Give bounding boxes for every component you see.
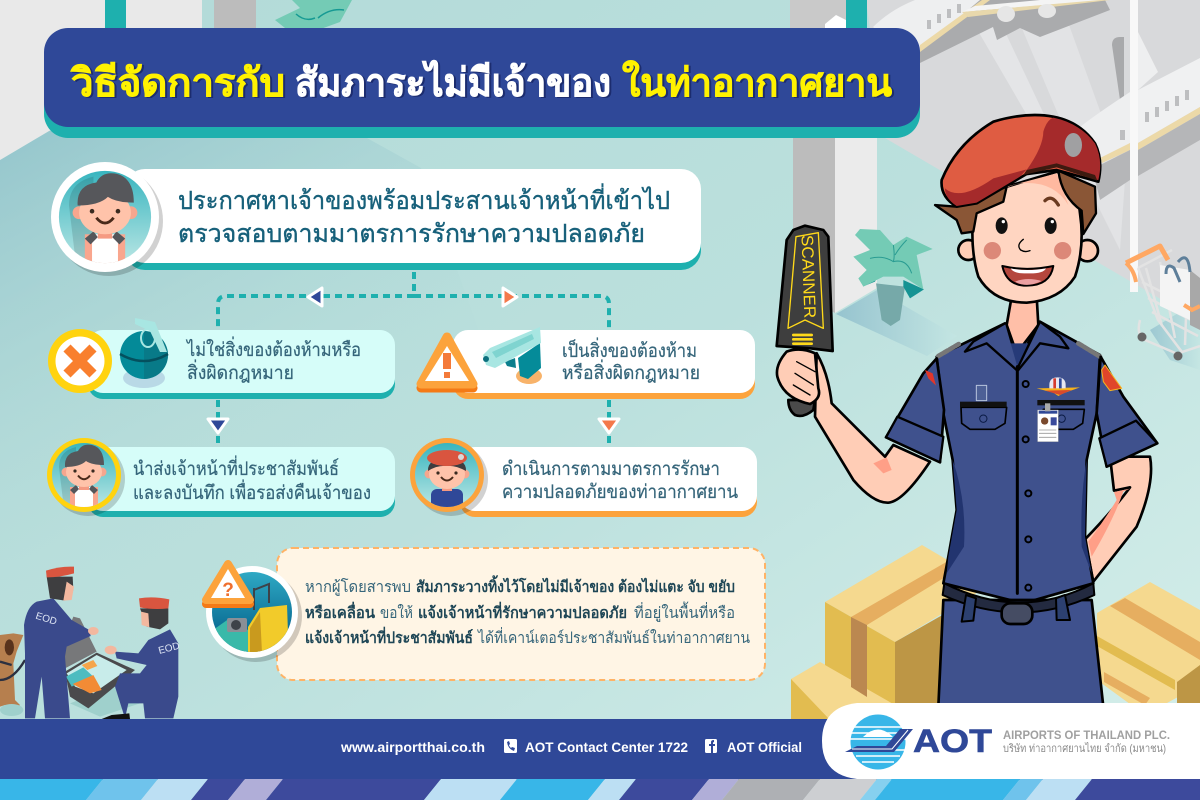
logo panel: AOT (913, 723, 993, 759)
open suitcase (62, 617, 140, 717)
box: hand over to public relations: และลงบันทึก เพื่อรอส่งคืนเจ้าของ (133, 479, 371, 504)
icon: handgun (483, 327, 542, 384)
notice callout (277, 548, 765, 680)
officer belt (943, 583, 1094, 624)
box: security measures: ความปลอดภัยของท่าอากาศยาน (502, 482, 738, 503)
step 1: announce for owner (51, 162, 701, 276)
icon: unattended luggage with question mark: ? (222, 580, 234, 601)
AOT logo mark (845, 714, 913, 770)
metal detector scanner: SCANNER (797, 235, 819, 319)
officer ID card (1038, 403, 1058, 442)
logo panel (822, 703, 1200, 779)
box: prohibited: หรือสิ่งผิดกฎหมาย (562, 359, 700, 384)
officer trousers (938, 600, 1103, 707)
logo panel: AIRPORTS OF THAILAND PLC. (1003, 728, 1170, 742)
sniffer dog (0, 633, 25, 716)
footer contact line: AOT Contact Center 1722 (525, 739, 688, 755)
box: hand over to public relations (47, 438, 395, 517)
potted plant (853, 229, 933, 326)
officer neck (1007, 297, 1038, 353)
EOD officer kneeling (102, 597, 181, 719)
officer right sleeve (886, 358, 944, 462)
avatar: security officer (410, 438, 488, 516)
notice callout: ได้ที่เคาน์เตอร์ประชาสัมพันธ์ในท่าอากาศยาน (476, 627, 750, 647)
footer contact line (340, 739, 802, 755)
shopping trolley with bag (1126, 246, 1200, 370)
EOD officer standing: EOD (34, 611, 58, 628)
step 1: announce for owner: ตรวจสอบตามมาตรการรักษาความปลอดภัย (178, 220, 645, 248)
box: security measures (410, 438, 757, 517)
title banner: ในท่าอากาศยาน (622, 60, 892, 105)
footer contact line: www.airportthai.co.th (340, 739, 485, 755)
plant at top behind banner (275, 0, 352, 32)
logo panel: บริษัท ท่าอากาศยานไทย จำกัด (มหาชน) (1003, 742, 1166, 755)
officer head (935, 171, 1098, 303)
footer bar (0, 703, 1200, 800)
title banner (44, 28, 920, 138)
officer arm on hip (1085, 457, 1151, 582)
notice callout: แจ้งเจ้าหน้าที่ประชาสัมพันธ์ (305, 626, 473, 647)
footer contact line: AOT Official (727, 739, 802, 755)
officer shirt (937, 322, 1100, 603)
box: prohibited: เป็นสิ่งของต้องห้าม (562, 337, 697, 362)
title banner: วิธีจัดการกับ (70, 62, 285, 105)
officer arm raising scanner (815, 353, 930, 503)
icon: grenade (120, 318, 168, 388)
notice callout: ที่อยู่ในพื้นที่หรือ (634, 601, 735, 623)
icon: unattended luggage with question mark (206, 564, 302, 662)
EOD officer kneeling: EOD (157, 641, 181, 657)
officer left sleeve (1097, 357, 1157, 467)
step 1 avatar (51, 162, 163, 276)
metal detector scanner (777, 226, 833, 351)
notice callout: หรือเคลื่อน (305, 601, 375, 622)
box: prohibited (421, 327, 755, 399)
box: security measures: ดำเนินการตามมาตรการรักษา (502, 459, 720, 480)
notice callout: แจ้งเจ้าหน้าที่รักษาความปลอดภัย (418, 601, 627, 622)
box: not prohibited: สิ่งผิดกฎหมาย (187, 359, 294, 384)
avatar: staff (47, 438, 125, 516)
notice callout: สัมภาระวางทิ้งไว้โดยไม่มีเจ้าของ ต้องไม่แตะ จับ ขยับ (416, 575, 735, 596)
box: not prohibited: ไม่ใช่สิ่งของต้องห้ามหรือ (185, 336, 361, 361)
notice callout: ขอให้ (380, 604, 413, 622)
EOD officer standing (24, 567, 99, 718)
officer wings badge (1037, 377, 1080, 396)
main character: security officer with scanner (777, 115, 1157, 707)
box: not prohibited (48, 318, 395, 399)
icon: cross (48, 329, 112, 393)
box: hand over to public relations: นำส่งเจ้าหน้าที่ประชาสัมพันธ์ (133, 455, 339, 480)
title banner: สัมภาระไม่มีเจ้าของ (295, 60, 611, 105)
icon: warning triangle (421, 337, 473, 388)
cardboard boxes (791, 545, 1200, 720)
flow connector lines (218, 272, 609, 447)
officer hand gripping scanner (777, 350, 819, 416)
EOD team inspecting a suitcase (0, 567, 181, 719)
airplane background (873, 0, 1200, 292)
footer colour stripes (0, 779, 1200, 800)
notice callout: หากผู้โดยสารพบ (305, 578, 411, 597)
step 1: announce for owner: ประกาศหาเจ้าของพร้อมประสานเจ้าหน้าที่เข้าไป (178, 183, 670, 215)
arrows on connectors (208, 288, 619, 433)
officer red beret (942, 115, 1100, 207)
terminal pillar with floor shadow (793, 130, 957, 356)
